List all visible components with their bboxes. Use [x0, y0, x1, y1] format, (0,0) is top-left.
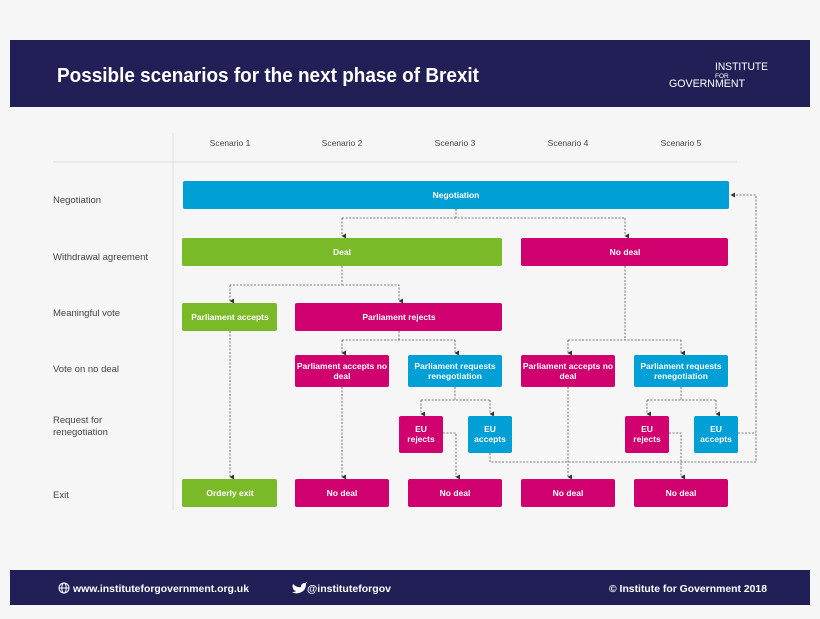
connectors: [230, 195, 756, 477]
row labels: Vote on no deal: [53, 364, 119, 375]
box: no deal: No deal: [610, 247, 640, 257]
box: parliament accepts no deal (s4): deal: [559, 371, 577, 381]
box: negotiation: Negotiation: [433, 190, 479, 200]
grid lines: [172, 133, 174, 510]
icon: globe: [59, 583, 69, 593]
box: EU accepts 2: [694, 416, 738, 453]
box: parliament accepts: Parliament accepts: [191, 312, 269, 322]
column headers: Scenario 1: [210, 138, 251, 148]
box: exit no deal s2: No deal: [327, 488, 357, 498]
box: EU rejects 1: rejects: [407, 434, 435, 444]
box: no deal: [521, 238, 728, 266]
column headers: [210, 138, 702, 148]
footer: @instituteforgov: [307, 583, 391, 595]
box: parliament requests renegotiation (s5): Parliament requests: [640, 361, 722, 371]
row labels: Negotiation: [53, 195, 101, 206]
box: EU accepts 1: accepts: [474, 434, 506, 444]
box: EU accepts 1: EU: [484, 424, 496, 434]
box: exit no deal s4: No deal: [553, 488, 583, 498]
row labels: Withdrawal agreement: [53, 252, 148, 263]
row labels: Request for: [53, 415, 102, 426]
box: exit no deal s5: [634, 479, 728, 507]
footer: [10, 570, 810, 605]
title: Possible scenarios for the next phase of Brexit: [57, 65, 479, 87]
box: parliament accepts no deal (s2): deal: [333, 371, 351, 381]
row labels: Meaningful vote: [53, 308, 120, 319]
box: exit no deal s5: No deal: [666, 488, 696, 498]
box: parliament accepts no deal (s2): [295, 355, 389, 387]
logo: INSTITUTE: [715, 61, 768, 73]
column headers: Scenario 3: [435, 138, 476, 148]
footer: © Institute for Government 2018: [609, 583, 767, 595]
box: parliament requests renegotiation (s5): [634, 355, 728, 387]
box: EU rejects 1: EU: [415, 424, 427, 434]
box: exit no deal s2: [295, 479, 389, 507]
box: EU rejects 2: rejects: [633, 434, 661, 444]
box: parliament requests renegotiation (s5): renegotiation: [654, 371, 708, 381]
row labels: [53, 195, 148, 501]
icon: twitter: [292, 582, 307, 593]
box: negotiation: [183, 181, 729, 209]
header: [10, 40, 810, 107]
box: orderly exit: Orderly exit: [206, 488, 254, 498]
logo: GOVERNMENT: [669, 78, 745, 90]
logo: [669, 61, 768, 90]
row labels: Exit: [53, 490, 69, 501]
box: parliament rejects: [295, 303, 502, 331]
box: parliament requests renegotiation (s3): [408, 355, 502, 387]
box: exit no deal s3: [408, 479, 502, 507]
box: EU accepts 2: accepts: [700, 434, 732, 444]
box: EU accepts 1: [468, 416, 512, 453]
footer: www.instituteforgovernment.org.uk: [72, 583, 249, 595]
box: parliament accepts no deal (s2): Parliament accepts no: [297, 361, 387, 371]
box: orderly exit: [182, 479, 277, 507]
row labels: renegotiation: [53, 427, 108, 438]
box: parliament accepts no deal (s4): Parliament accepts no: [523, 361, 613, 371]
column headers: Scenario 4: [548, 138, 589, 148]
box: parliament accepts: [182, 303, 277, 331]
box: deal: Deal: [333, 247, 351, 257]
box: parliament accepts no deal (s4): [521, 355, 615, 387]
logo: FOR: [715, 73, 729, 80]
box: EU rejects 2: EU: [641, 424, 653, 434]
box: exit no deal s3: No deal: [440, 488, 470, 498]
box: EU rejects 2: [625, 416, 669, 453]
box: deal: [182, 238, 502, 266]
box: EU accepts 2: EU: [710, 424, 722, 434]
column headers: Scenario 2: [322, 138, 363, 148]
box: exit no deal s4: [521, 479, 615, 507]
box: parliament requests renegotiation (s3): renegotiation: [428, 371, 482, 381]
column headers: Scenario 5: [661, 138, 702, 148]
box: EU rejects 1: [399, 416, 443, 453]
box: parliament requests renegotiation (s3): Parliament requests: [414, 361, 496, 371]
box: parliament rejects: Parliament rejects: [362, 312, 436, 322]
